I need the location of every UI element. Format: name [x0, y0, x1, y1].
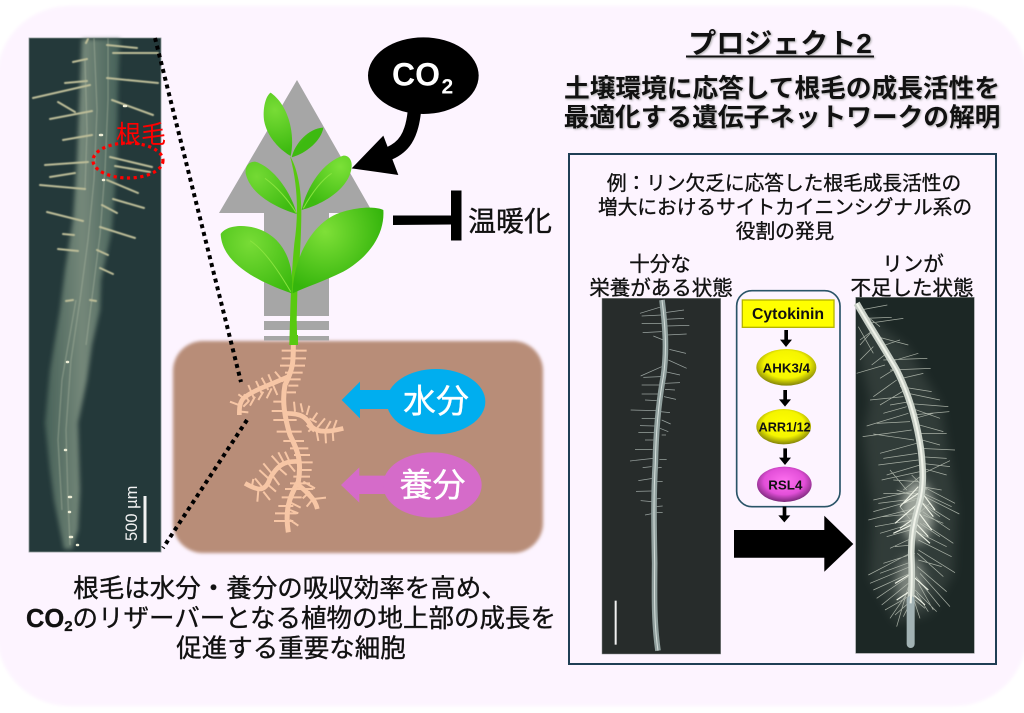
root highlight	[857, 303, 923, 603]
root highlight	[654, 300, 665, 651]
ARR node	[756, 409, 811, 444]
subtitle	[564, 74, 1000, 132]
ARR node: ARR1/12	[759, 421, 811, 435]
label: phosphate deficient: 不足した状態	[850, 277, 974, 300]
big black arrow	[734, 516, 853, 572]
caption: 促進する重要な細胞	[176, 635, 406, 663]
lower bright mass	[897, 557, 925, 607]
leaf: large left	[221, 226, 292, 293]
Cytokinin box: Cytokinin	[752, 306, 824, 323]
example heading: 役割の発見	[736, 221, 834, 243]
caption	[26, 575, 556, 663]
scale label: 500 µm	[123, 486, 141, 541]
plant	[221, 93, 383, 345]
AHK node: AHK3/4	[763, 361, 811, 376]
soil panel	[173, 341, 543, 553]
nutrient arrow and bubble	[341, 452, 482, 518]
photo: root hairs	[33, 39, 158, 301]
grey upward arrow	[219, 80, 373, 340]
example heading: 増大におけるサイトカイニンシグナル系の	[598, 197, 972, 219]
CO2 label: CO	[392, 56, 440, 92]
example heading	[598, 173, 972, 243]
panel: root photograph	[29, 38, 161, 552]
photo: phosphate deficient root	[856, 297, 974, 653]
panel: example frame	[569, 154, 996, 664]
subtitle: 土壌環境に応答して根毛の成長活性を	[564, 74, 1000, 103]
inhibition bar	[393, 190, 462, 240]
caption: 2	[64, 618, 73, 635]
dense root hairs	[857, 305, 959, 627]
bright hair strokes	[893, 487, 935, 605]
label: warming: 温暖化	[468, 206, 552, 237]
leaf veins	[250, 173, 332, 292]
bright mass	[901, 480, 933, 543]
callout: root hair dotted ellipse	[93, 143, 163, 178]
pathway arrows	[778, 330, 792, 522]
label: nutrients: 養分	[400, 466, 466, 504]
scale bar	[144, 496, 146, 543]
Cytokinin box	[742, 300, 834, 327]
branches	[239, 377, 343, 509]
leaf: middle left	[246, 162, 297, 214]
CO2 bubble	[368, 37, 479, 114]
main root	[857, 303, 923, 603]
main root	[284, 345, 300, 532]
title: プロジェクト2	[688, 28, 872, 59]
root hairs	[230, 351, 337, 526]
leaf: top left	[264, 93, 292, 156]
CO2 bubble with arrow	[352, 37, 479, 175]
CO2 label: 2	[442, 76, 453, 98]
subtitle: 最適化する遺伝子ネットワークの解明	[564, 103, 1000, 132]
caption: のリザーバーとなる植物の地上部の成長を	[73, 605, 556, 633]
dotted zoom lines	[155, 38, 247, 548]
plant stem	[289, 156, 301, 345]
label: water: 水分	[403, 382, 469, 420]
thin root hairs	[630, 307, 689, 515]
hair haze	[860, 310, 957, 623]
photo: sufficient nutrients root	[602, 298, 721, 654]
water arrow and bubble	[342, 369, 485, 434]
caption: 根毛は水分・養分の吸収効率を高め、	[73, 575, 507, 603]
main root	[654, 300, 665, 651]
label: sufficient nutrients: 栄養がある状態	[589, 277, 733, 300]
photo: root body	[45, 39, 120, 549]
label: phosphate deficient	[850, 253, 974, 300]
pathway box	[737, 291, 840, 522]
root tip	[899, 600, 923, 644]
leaf: middle right	[302, 156, 352, 210]
CO2 curved arrow	[389, 112, 414, 153]
label: sufficient nutrients: 十分な	[629, 253, 691, 276]
stem base	[290, 335, 298, 345]
photo: bright specks	[65, 106, 126, 545]
label: root hair: 根毛	[116, 121, 166, 149]
CO2 arrow head	[352, 136, 398, 175]
example heading: 例：リン欠乏に応答した根毛成長活性の	[607, 173, 961, 195]
RSL4 node: RSL4	[768, 477, 803, 492]
label: phosphate deficient: リンが	[882, 253, 944, 276]
label: sufficient nutrients	[589, 253, 733, 300]
leaf: top right	[292, 128, 323, 157]
photo: root strands	[58, 38, 108, 545]
scale bar	[615, 601, 617, 645]
roots	[230, 345, 343, 532]
AHK node	[756, 349, 816, 386]
leaf: large right	[293, 208, 383, 293]
RSL4 node	[757, 467, 812, 502]
caption: CO	[26, 605, 64, 633]
